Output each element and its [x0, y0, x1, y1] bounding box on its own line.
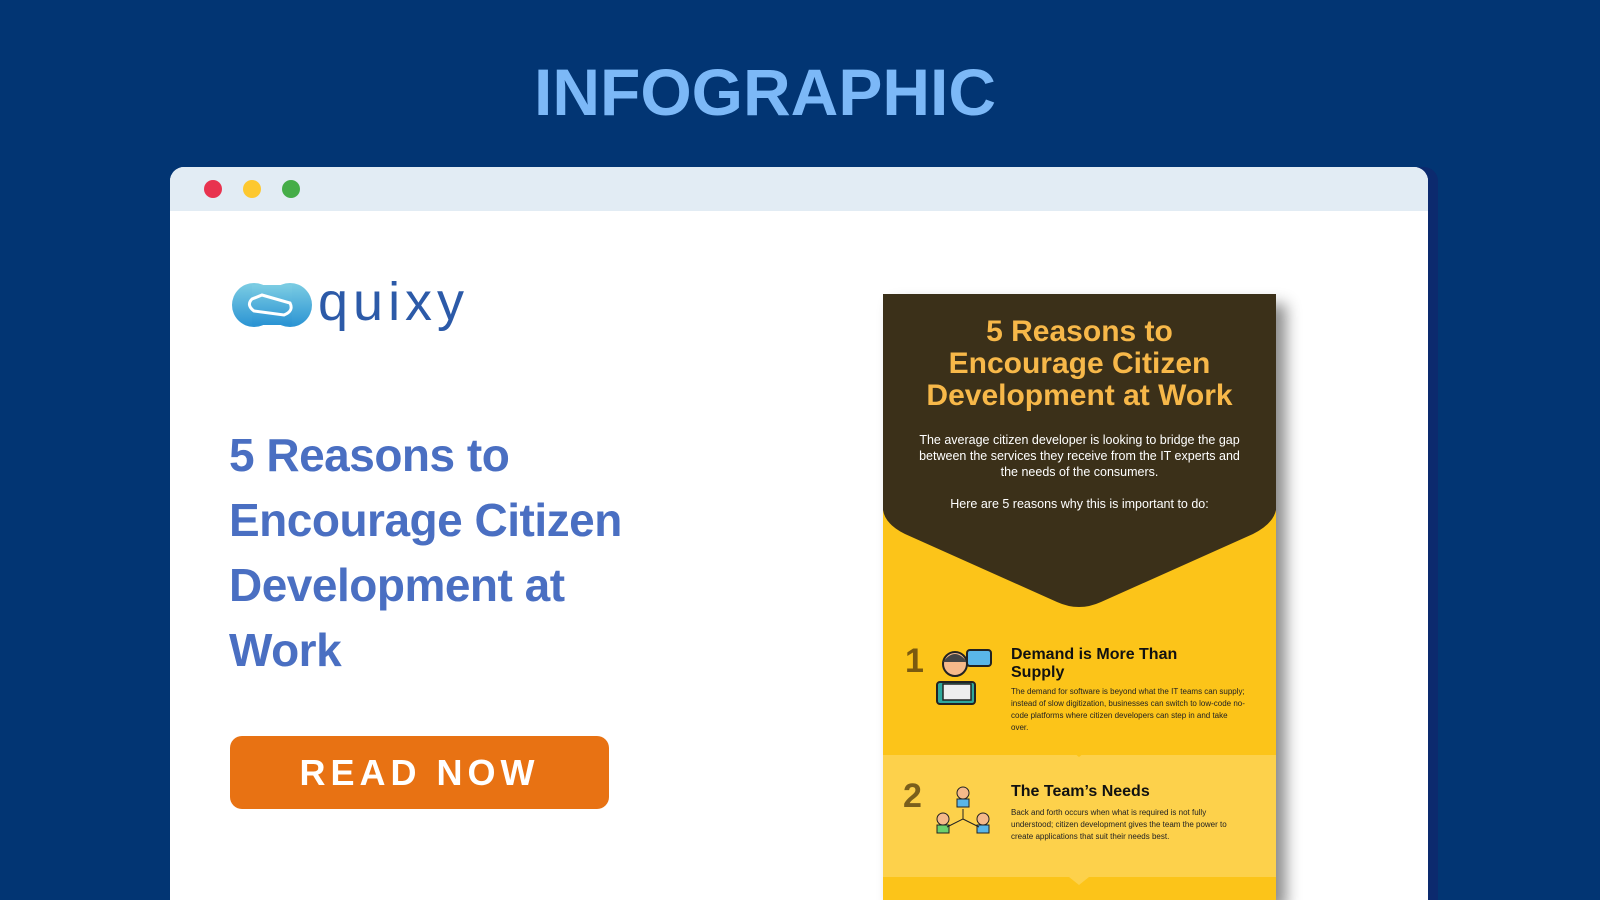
logo text: quixy [318, 272, 469, 332]
number 2: 2 [903, 777, 922, 815]
intro text: The average citizen developer is looking to bridge the gap between the services they receive from the IT experts and the needs of the consumers. [919, 433, 1240, 479]
intro text: Here are 5 reasons why this is important to do: [950, 497, 1209, 511]
infographic title: 5 Reasons to [986, 315, 1173, 348]
heading: 5 Reasons to Encourage Citizen Development at Work [229, 429, 622, 676]
button: read now: READ NOW [300, 752, 540, 793]
number 1: 1 [905, 642, 924, 680]
infographic title [926, 315, 1233, 412]
infographic title: Encourage Citizen [949, 347, 1210, 380]
dark header shape [883, 294, 1276, 607]
browser window [170, 167, 1428, 900]
item 1 text: The demand for software is beyond what the IT teams can supply; instead of slow digitization, businesses can switch to low-code no-code platforms where citizen developers can step in and take over. [1011, 687, 1245, 732]
icon: infinity loop [232, 283, 312, 327]
item 2 [883, 755, 1276, 877]
icon: developer [936, 649, 992, 705]
title: INFOGRAPHIC [534, 55, 996, 129]
button: read now [230, 736, 609, 809]
intro text [919, 433, 1240, 511]
window header bar [170, 167, 1428, 211]
icon: team [936, 786, 990, 834]
infographic title: Development at Work [926, 379, 1233, 412]
infographic preview [883, 294, 1276, 900]
item 2 heading: The Team’s Needs [1011, 783, 1150, 800]
item 2 text: Back and forth occurs when what is required is not fully understood; citizen development gives the team the power to create applications that suit their needs best. [1011, 808, 1227, 841]
item 1 [905, 642, 1245, 732]
item 1 heading: Demand is More Than Supply [1011, 646, 1177, 681]
window dots [204, 180, 300, 198]
logo: quixy [232, 272, 469, 332]
